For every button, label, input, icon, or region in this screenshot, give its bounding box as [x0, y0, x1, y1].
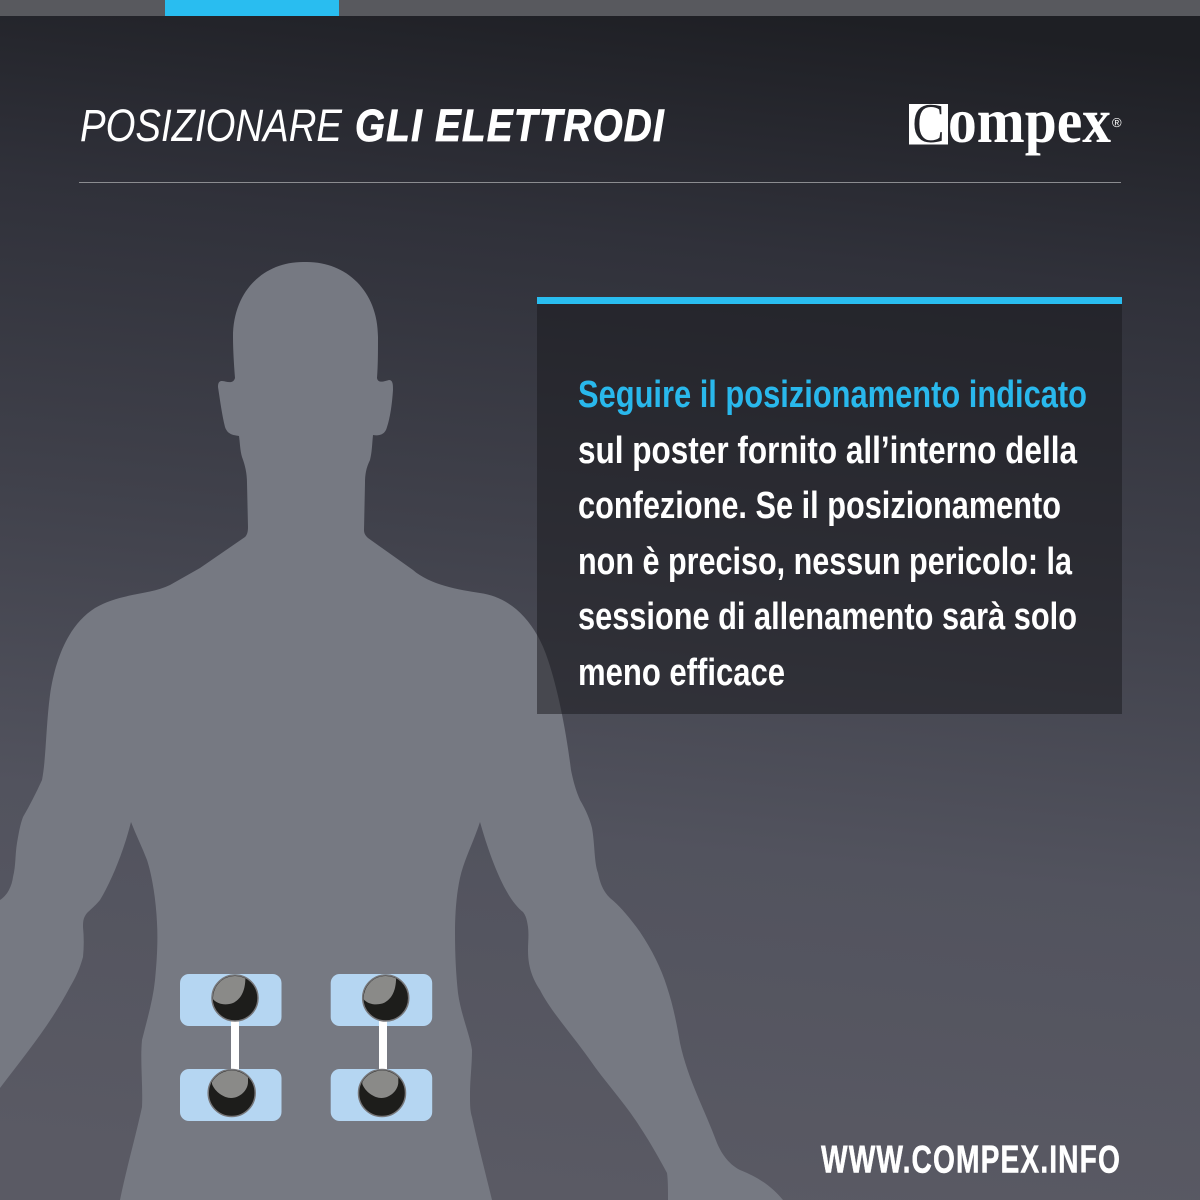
snap button: top right [363, 970, 409, 1021]
logo: Compex: ompex [948, 85, 1111, 156]
logo: Compex: ® [1112, 115, 1122, 130]
instruction text: non è preciso, nessun pericolo: la [578, 541, 1073, 583]
instruction text: Seguire il posizionamento indicato [578, 374, 1087, 416]
title [80, 100, 665, 151]
panel: instructions [537, 297, 1122, 714]
electrodes [180, 970, 432, 1121]
snap button: bottom left [208, 1066, 255, 1116]
title: GLI ELETTRODI [355, 100, 665, 151]
instruction text: meno efficace [578, 652, 785, 694]
electrode pads [180, 974, 432, 1121]
instruction text: confezione. Se il posizionamento [578, 485, 1061, 527]
title: POSIZIONARE [80, 100, 343, 151]
instruction text: sessione di allenamento sarà solo [578, 596, 1077, 638]
human silhouette [0, 262, 783, 1200]
top progress bar [0, 0, 1200, 16]
instruction text: sul poster fornito all’interno della [578, 430, 1078, 472]
connecting wires [231, 1020, 387, 1072]
instruction text [578, 374, 1087, 694]
logo: Compex: C [912, 93, 944, 155]
snap button: bottom right [358, 1066, 406, 1116]
snap button: top left [212, 970, 258, 1021]
